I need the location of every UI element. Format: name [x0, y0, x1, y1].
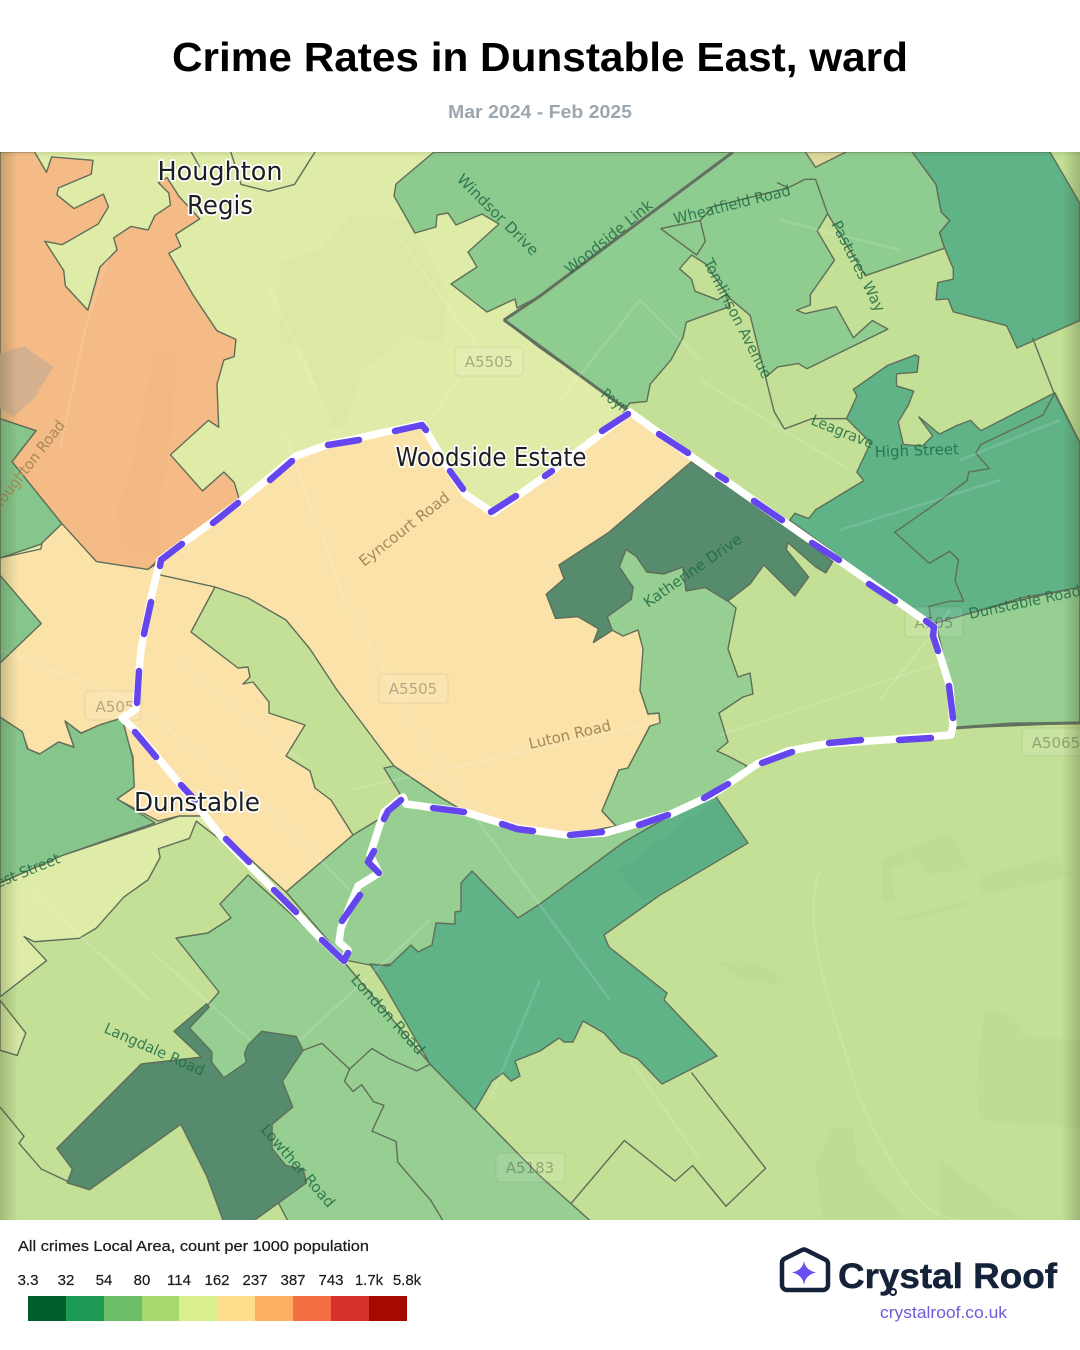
- road number badges: A5505: [389, 680, 437, 698]
- water patch: [0, 346, 53, 417]
- area: cream main ward: [160, 412, 692, 835]
- website: crystalroof.co.uk: [880, 1304, 1008, 1322]
- wordmark: Crystal Roof: [838, 1257, 1057, 1296]
- area: darker green north-east: [912, 152, 1080, 348]
- icon: house with star: [782, 1250, 828, 1290]
- vignette: [0, 152, 1080, 1220]
- legend labels: 54: [96, 1272, 112, 1289]
- road number badges: A5065: [1032, 734, 1080, 752]
- area: darker green south: [370, 797, 748, 1110]
- street names: Langdale Road: [101, 1019, 207, 1080]
- area: orange Houghton Regis: [0, 152, 239, 569]
- legend labels: 387: [280, 1272, 306, 1289]
- area: pale lime north: [0, 152, 630, 560]
- street names: Poyn: [598, 385, 632, 417]
- area: darker green Leagrave: [790, 355, 1080, 624]
- thick boundary lines: [504, 152, 1080, 728]
- area: medium green Katherine Drive: [602, 549, 753, 826]
- area: dark green south-west: [57, 1004, 307, 1222]
- road number badges: A505: [915, 614, 953, 632]
- street names: Wheatfield Road: [672, 181, 792, 228]
- street names: [0, 170, 1080, 1211]
- street names: Luton Road: [527, 716, 613, 753]
- legend title: All crimes Local Area, count per 1000 population: [18, 1238, 369, 1255]
- date range subtitle: Mar 2024 - Feb 2025: [448, 102, 632, 122]
- road number badges: A505: [96, 698, 134, 716]
- park patch: [279, 215, 448, 429]
- road number badges: [85, 347, 1080, 1182]
- area: medium green west of Dunstable: [0, 717, 155, 883]
- area: pale strip West Street: [0, 816, 219, 1055]
- title: Crime Rates in Dunstable East, ward: [172, 34, 908, 80]
- legend colour bar: [28, 1296, 407, 1321]
- darker patch in south green area: [737, 828, 746, 842]
- street names: London Road: [347, 971, 429, 1058]
- legend labels: 114: [167, 1272, 191, 1289]
- area: cream west Dunstable: [0, 523, 353, 892]
- area: medium green London Road: [176, 875, 595, 1225]
- street names: Pastures Way: [827, 218, 889, 315]
- farmland patches south-east: [716, 833, 1080, 1220]
- legend: [18, 1238, 422, 1321]
- legend labels: 32: [58, 1272, 74, 1289]
- street names: Windsor Drive: [453, 170, 542, 259]
- road number badges: A5183: [506, 1159, 554, 1177]
- legend labels: 1.7k: [355, 1272, 384, 1289]
- legend labels: 80: [134, 1272, 150, 1289]
- place names: Woodside Estate: [396, 443, 586, 473]
- area: green Windsor Drive: [394, 152, 733, 312]
- ward boundary casing: [122, 412, 953, 961]
- street names: Lowther Road: [257, 1121, 339, 1211]
- legend labels: [18, 1272, 422, 1289]
- logo keyhole accent: [890, 1289, 896, 1295]
- legend labels: 237: [242, 1272, 268, 1289]
- place names: Regis: [187, 191, 253, 221]
- darker patch in orange area: [115, 350, 176, 556]
- street names: Leagrave: [809, 411, 876, 452]
- choropleth map: [0, 152, 1080, 1225]
- legend labels: 162: [204, 1272, 230, 1289]
- area: medium green east: [936, 587, 1080, 728]
- legend labels: 3.3: [18, 1272, 38, 1289]
- area: green Woodside and Wheatfield: [504, 152, 950, 408]
- street names: Eyncourt Road: [355, 488, 453, 570]
- logo: Crystal Roof: [782, 1250, 1057, 1322]
- street names: Katherine Drive: [640, 530, 745, 611]
- road number badges: A5505: [465, 353, 513, 371]
- place names: [134, 157, 586, 818]
- street names: Tomlinson Avenue: [699, 255, 775, 381]
- road network: [0, 220, 1060, 1220]
- legend labels: 743: [318, 1272, 344, 1289]
- area: medium green south of ward: [285, 765, 658, 966]
- street names: Woodside Link: [561, 196, 657, 278]
- area: dark green Katherine Drive: [546, 462, 833, 642]
- place names: Houghton: [158, 157, 282, 187]
- ward boundary dashes: [135, 414, 953, 961]
- legend labels: 5.8k: [393, 1272, 422, 1289]
- place names: Dunstable: [134, 788, 260, 818]
- area: medium green far west: [0, 419, 62, 663]
- area boundary lines: [0, 152, 1080, 1220]
- street names: High Street: [875, 440, 959, 461]
